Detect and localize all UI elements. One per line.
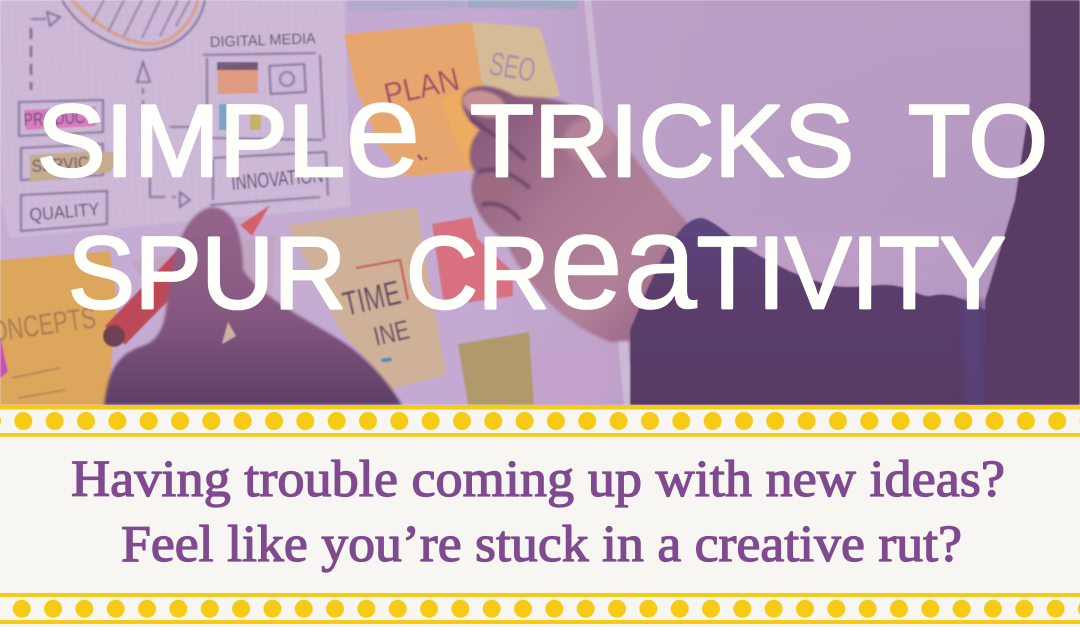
hero photo: hands placing sticky notes on a window <box>0 0 1080 405</box>
sticky note: TIME LINE: INE <box>371 315 412 352</box>
sketch paper: DIGITAL MEDIA <box>210 30 316 51</box>
title: CReaTIVITY <box>406 185 1006 337</box>
sketch paper: SERVICE <box>31 152 100 176</box>
sketch paper <box>0 0 350 238</box>
sticky note: red <box>432 217 513 306</box>
sketch paper: QUALITY <box>29 199 100 225</box>
sticky note: TIME LINE: TIME <box>339 274 404 324</box>
cream subtitle panel <box>0 405 1080 627</box>
top stripes on the window <box>348 0 578 13</box>
title: SIMPLe <box>37 53 421 205</box>
subtitle <box>71 451 1005 573</box>
sketch paper: PRODUCT <box>23 106 94 130</box>
title: TO <box>908 84 1048 198</box>
subtitle: Having trouble coming up with new ideas? <box>71 451 1005 508</box>
sweater sleeve <box>630 218 1000 405</box>
subtitle: Feel like you’re stuck in a creative rut? <box>121 516 962 573</box>
title: TRICKS <box>470 84 854 198</box>
sticky note: PLAN: PLAN <box>380 61 463 113</box>
right hand holding note <box>459 86 690 342</box>
bottom dotted band <box>0 593 1080 625</box>
sticky note: TIME LINE <box>130 207 446 389</box>
sticky note: SEO: SEO <box>487 44 539 89</box>
title <box>37 53 1048 337</box>
top dotted band <box>0 405 1080 437</box>
sticky note: PLAN <box>344 22 517 177</box>
sticky note: yellow <box>458 332 534 405</box>
dark foreground column <box>985 0 1080 405</box>
title: SPUR <box>68 216 346 330</box>
sticky note: CONCEPTS <box>0 251 117 405</box>
left hand with red pen <box>103 205 402 405</box>
sketch paper: INNOVATION <box>230 164 324 195</box>
sticky note: SEO <box>472 22 560 100</box>
